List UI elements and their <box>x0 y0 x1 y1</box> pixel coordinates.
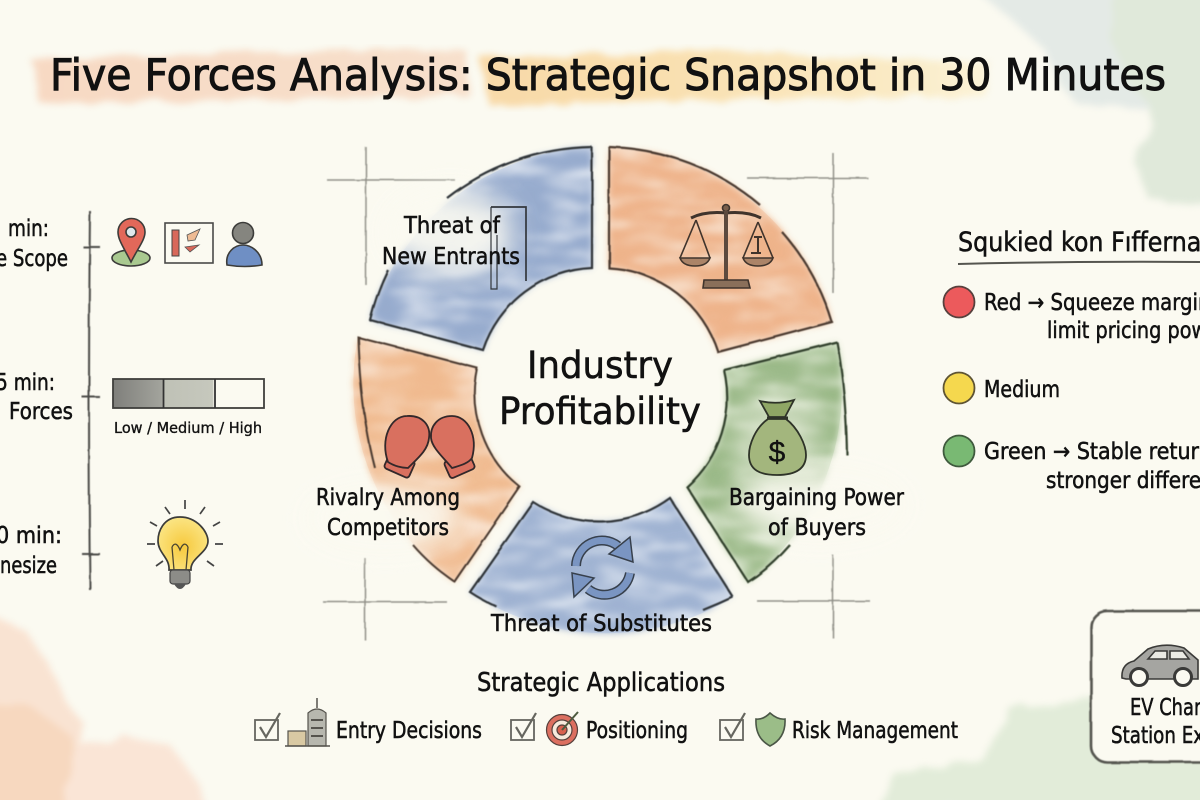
segment: threat of substitutes <box>470 498 733 637</box>
legend: yellow: Medium <box>984 377 1060 403</box>
example card <box>1091 611 1200 762</box>
card text <box>1111 695 1200 749</box>
step 1 icon: location pin <box>112 218 150 266</box>
label: threat of new entrants: New Entrants <box>382 244 520 270</box>
step 1 icon: person <box>227 222 262 266</box>
label: bargaining power of buyers: of Buyers <box>768 515 866 541</box>
icon: boxing gloves <box>384 416 476 479</box>
watercolor wash: top right <box>975 0 1200 205</box>
icon: money bag: $ <box>769 436 786 469</box>
application: entry decisions: Entry Decisions <box>336 718 482 744</box>
label: bargaining power of buyers <box>729 485 904 541</box>
rating bar label: Low / Medium / High <box>114 419 262 437</box>
center label: Profitability <box>499 390 701 433</box>
segment: rivalry among competitors <box>307 337 520 582</box>
five forces ring <box>307 147 905 637</box>
step 1 text: min: <box>8 216 49 242</box>
center label: Industry <box>527 344 673 387</box>
icon: scales <box>680 204 773 288</box>
watercolor wash: bottom left <box>0 615 210 800</box>
step 2 text: Forces <box>9 399 73 425</box>
legend: yellow <box>944 372 1060 404</box>
step 1 text <box>0 216 68 272</box>
label: threat of substitutes: Threat of Substitutes <box>490 611 712 637</box>
label: rivalry among competitors <box>316 485 460 541</box>
icon: car <box>1122 645 1198 686</box>
timeline panel <box>0 211 264 590</box>
application: risk management: Risk Management <box>792 718 958 744</box>
label: rivalry among competitors: Rivalry Among <box>316 485 460 511</box>
segment: threat of new entrants <box>370 147 592 350</box>
label: threat of new entrants: Threat of <box>403 213 501 239</box>
segment: bargaining power of buyers <box>687 342 905 582</box>
step 3 text: nesize <box>0 553 57 579</box>
legend: red <box>944 286 1200 344</box>
segment: bargaining power of suppliers <box>609 147 832 352</box>
icon: money bag <box>749 400 806 475</box>
applications heading: Strategic Applications <box>477 668 725 698</box>
timeline axis <box>82 211 100 590</box>
strategic applications <box>255 668 958 746</box>
legend: green <box>944 436 1200 494</box>
application: risk management <box>720 713 958 746</box>
label: threat of new entrants <box>382 213 520 270</box>
legend panel <box>944 227 1200 494</box>
watercolor wash: bottom right <box>880 680 1200 800</box>
rating bar <box>113 379 264 408</box>
title <box>33 50 1166 106</box>
application: positioning <box>511 712 688 746</box>
crop marks <box>323 147 870 640</box>
step 3 text <box>0 523 62 579</box>
application: positioning: Positioning <box>586 718 688 744</box>
icon: light bulb <box>147 500 223 589</box>
step 1 icon: map <box>165 223 213 263</box>
application: entry decisions <box>255 698 482 746</box>
label: bargaining power of buyers: Bargaining Power <box>729 485 904 511</box>
center label <box>499 344 701 433</box>
label: rivalry among competitors: Competitors <box>327 515 449 541</box>
step 2 text <box>0 370 73 425</box>
title brush stroke <box>33 50 990 106</box>
icon: cycle arrows <box>572 537 633 597</box>
card frame <box>1091 611 1200 762</box>
icon: door <box>491 207 526 289</box>
